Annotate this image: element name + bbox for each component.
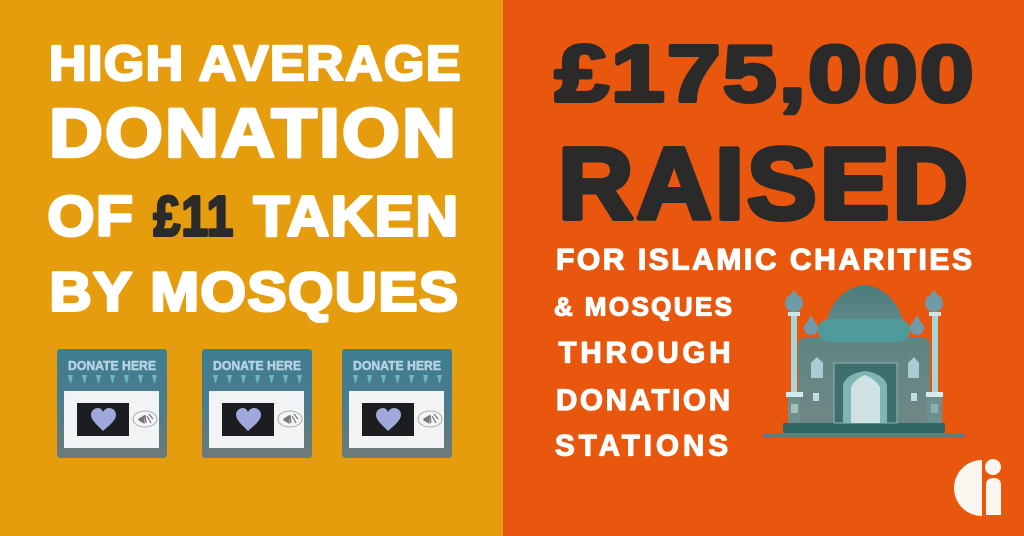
icon: mosque xyxy=(763,285,965,438)
icon: donation station 1 xyxy=(57,349,167,458)
text: for Islamic charities and mosques through donation stations: STATIONS xyxy=(555,430,728,462)
heading: high average donation of £11 taken by mosques: HIGH AVERAGE xyxy=(49,37,462,91)
text: for Islamic charities and mosques through donation stations: DONATION xyxy=(556,384,730,417)
panel: right orange background xyxy=(503,0,1024,536)
text: for Islamic charities and mosques through donation stations: THROUGH xyxy=(558,336,730,370)
heading: high average donation of £11 taken by mosques: TAKEN xyxy=(254,184,460,248)
panel: left amber background xyxy=(0,0,503,536)
heading: £175,000 raised: RAISED xyxy=(558,128,971,240)
icon: donation station 3 xyxy=(342,349,452,458)
text: for Islamic charities and mosques through donation stations xyxy=(554,244,972,462)
heading: high average donation of £11 taken by mosques: BY MOSQUES xyxy=(50,260,459,322)
text: for Islamic charities and mosques through donation stations: & MOSQUES xyxy=(554,292,732,322)
icon: logo xyxy=(954,459,1001,516)
heading: high average donation of £11 taken by mosques xyxy=(48,37,462,322)
text: for Islamic charities and mosques through donation stations: FOR ISLAMIC CHARITIES xyxy=(556,244,972,276)
heading: £175,000 raised: £175,000 xyxy=(555,29,976,118)
heading: high average donation of £11 taken by mosques: £11 xyxy=(154,184,234,248)
heading: high average donation of £11 taken by mosques: OF xyxy=(48,184,134,248)
heading: £175,000 raised xyxy=(555,29,976,240)
icon: donation station 2 xyxy=(202,349,312,458)
heading: high average donation of £11 taken by mosques: DONATION xyxy=(49,94,458,172)
